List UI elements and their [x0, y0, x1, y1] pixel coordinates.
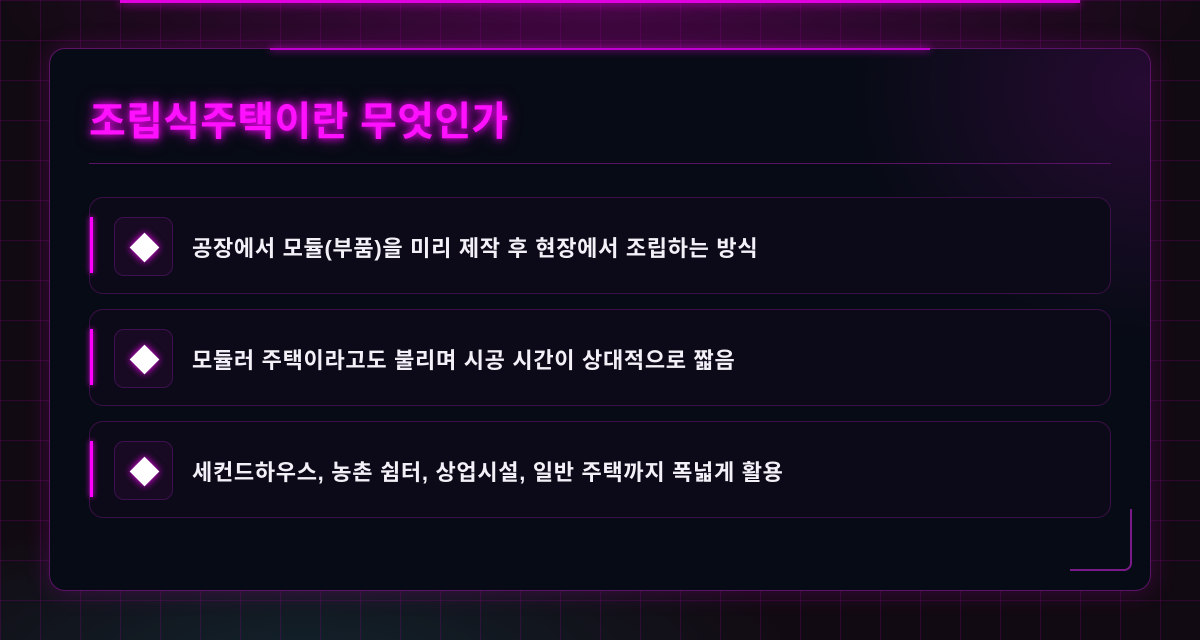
title: 조립식주택이란 무엇인가: [89, 100, 509, 144]
text 3: 세컨드하우스, 농촌 쉼터, 상업시설, 일반 주택까지 폭넓게 활용: [192, 460, 784, 485]
corner bracket: [1070, 509, 1132, 571]
panel: main card: [49, 48, 1151, 591]
item 3: [89, 421, 1111, 518]
icon: diamond: [114, 441, 173, 500]
item 1: [89, 197, 1111, 294]
icon: diamond: [114, 329, 173, 388]
icon: diamond: [114, 217, 173, 276]
text 2: 모듈러 주택이라고도 불리며 시공 시간이 상대적으로 짧음: [192, 348, 735, 373]
item 2: [89, 309, 1111, 406]
text 1: 공장에서 모듈(부품)을 미리 제작 후 현장에서 조립하는 방식: [192, 236, 758, 261]
